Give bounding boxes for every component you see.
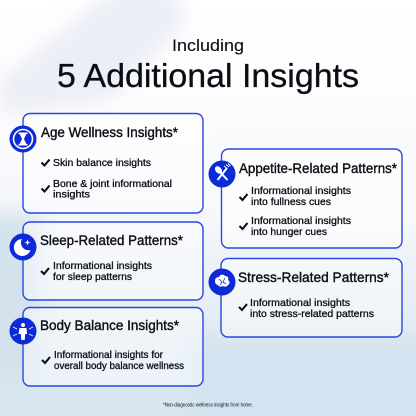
item: insights [53, 188, 90, 200]
icon: moon [10, 234, 36, 260]
check [240, 194, 248, 200]
check [240, 223, 248, 229]
check [41, 268, 49, 274]
heading: Appetite-Related Patterns* [239, 160, 398, 176]
check [42, 186, 50, 192]
icon: cutlery [208, 160, 236, 188]
panel: body balance insights [10, 308, 203, 386]
footnote: *Non-diagnostic wellness insights from home. [163, 402, 253, 408]
icon: hourglass [10, 126, 36, 152]
heading: Body Balance Insights* [40, 317, 180, 333]
check [239, 304, 247, 310]
item: Bone & joint informational [53, 178, 172, 190]
panel: appetite-related patterns [208, 149, 402, 248]
heading: Age Wellness Insights* [41, 124, 179, 140]
panel: stress-related patterns [208, 258, 402, 337]
item: Informational insights [251, 215, 351, 227]
icon: stress [208, 268, 236, 296]
panel: age wellness insights [10, 114, 203, 213]
panel: sleep-related patterns [10, 222, 203, 300]
heading: Stress-Related Patterns* [238, 269, 390, 285]
item: Informational insights [250, 297, 350, 309]
item: Informational insights for [54, 349, 163, 361]
item: overall body balance wellness [54, 360, 184, 372]
check [42, 357, 50, 363]
title: 5 Additional Insights [57, 57, 359, 94]
item: Informational insights [251, 185, 351, 197]
icon: body [10, 318, 36, 344]
heading: including: Including [172, 36, 244, 55]
item: Informational insights [53, 260, 152, 272]
item: for sleep patterns [53, 271, 132, 283]
check [42, 160, 50, 166]
item: into stress-related patterns [250, 308, 374, 320]
item: into hunger cues [251, 226, 327, 238]
item: Skin balance insights [53, 157, 151, 169]
heading: Sleep-Related Patterns* [40, 232, 184, 248]
item: into fullness cues [251, 196, 331, 208]
